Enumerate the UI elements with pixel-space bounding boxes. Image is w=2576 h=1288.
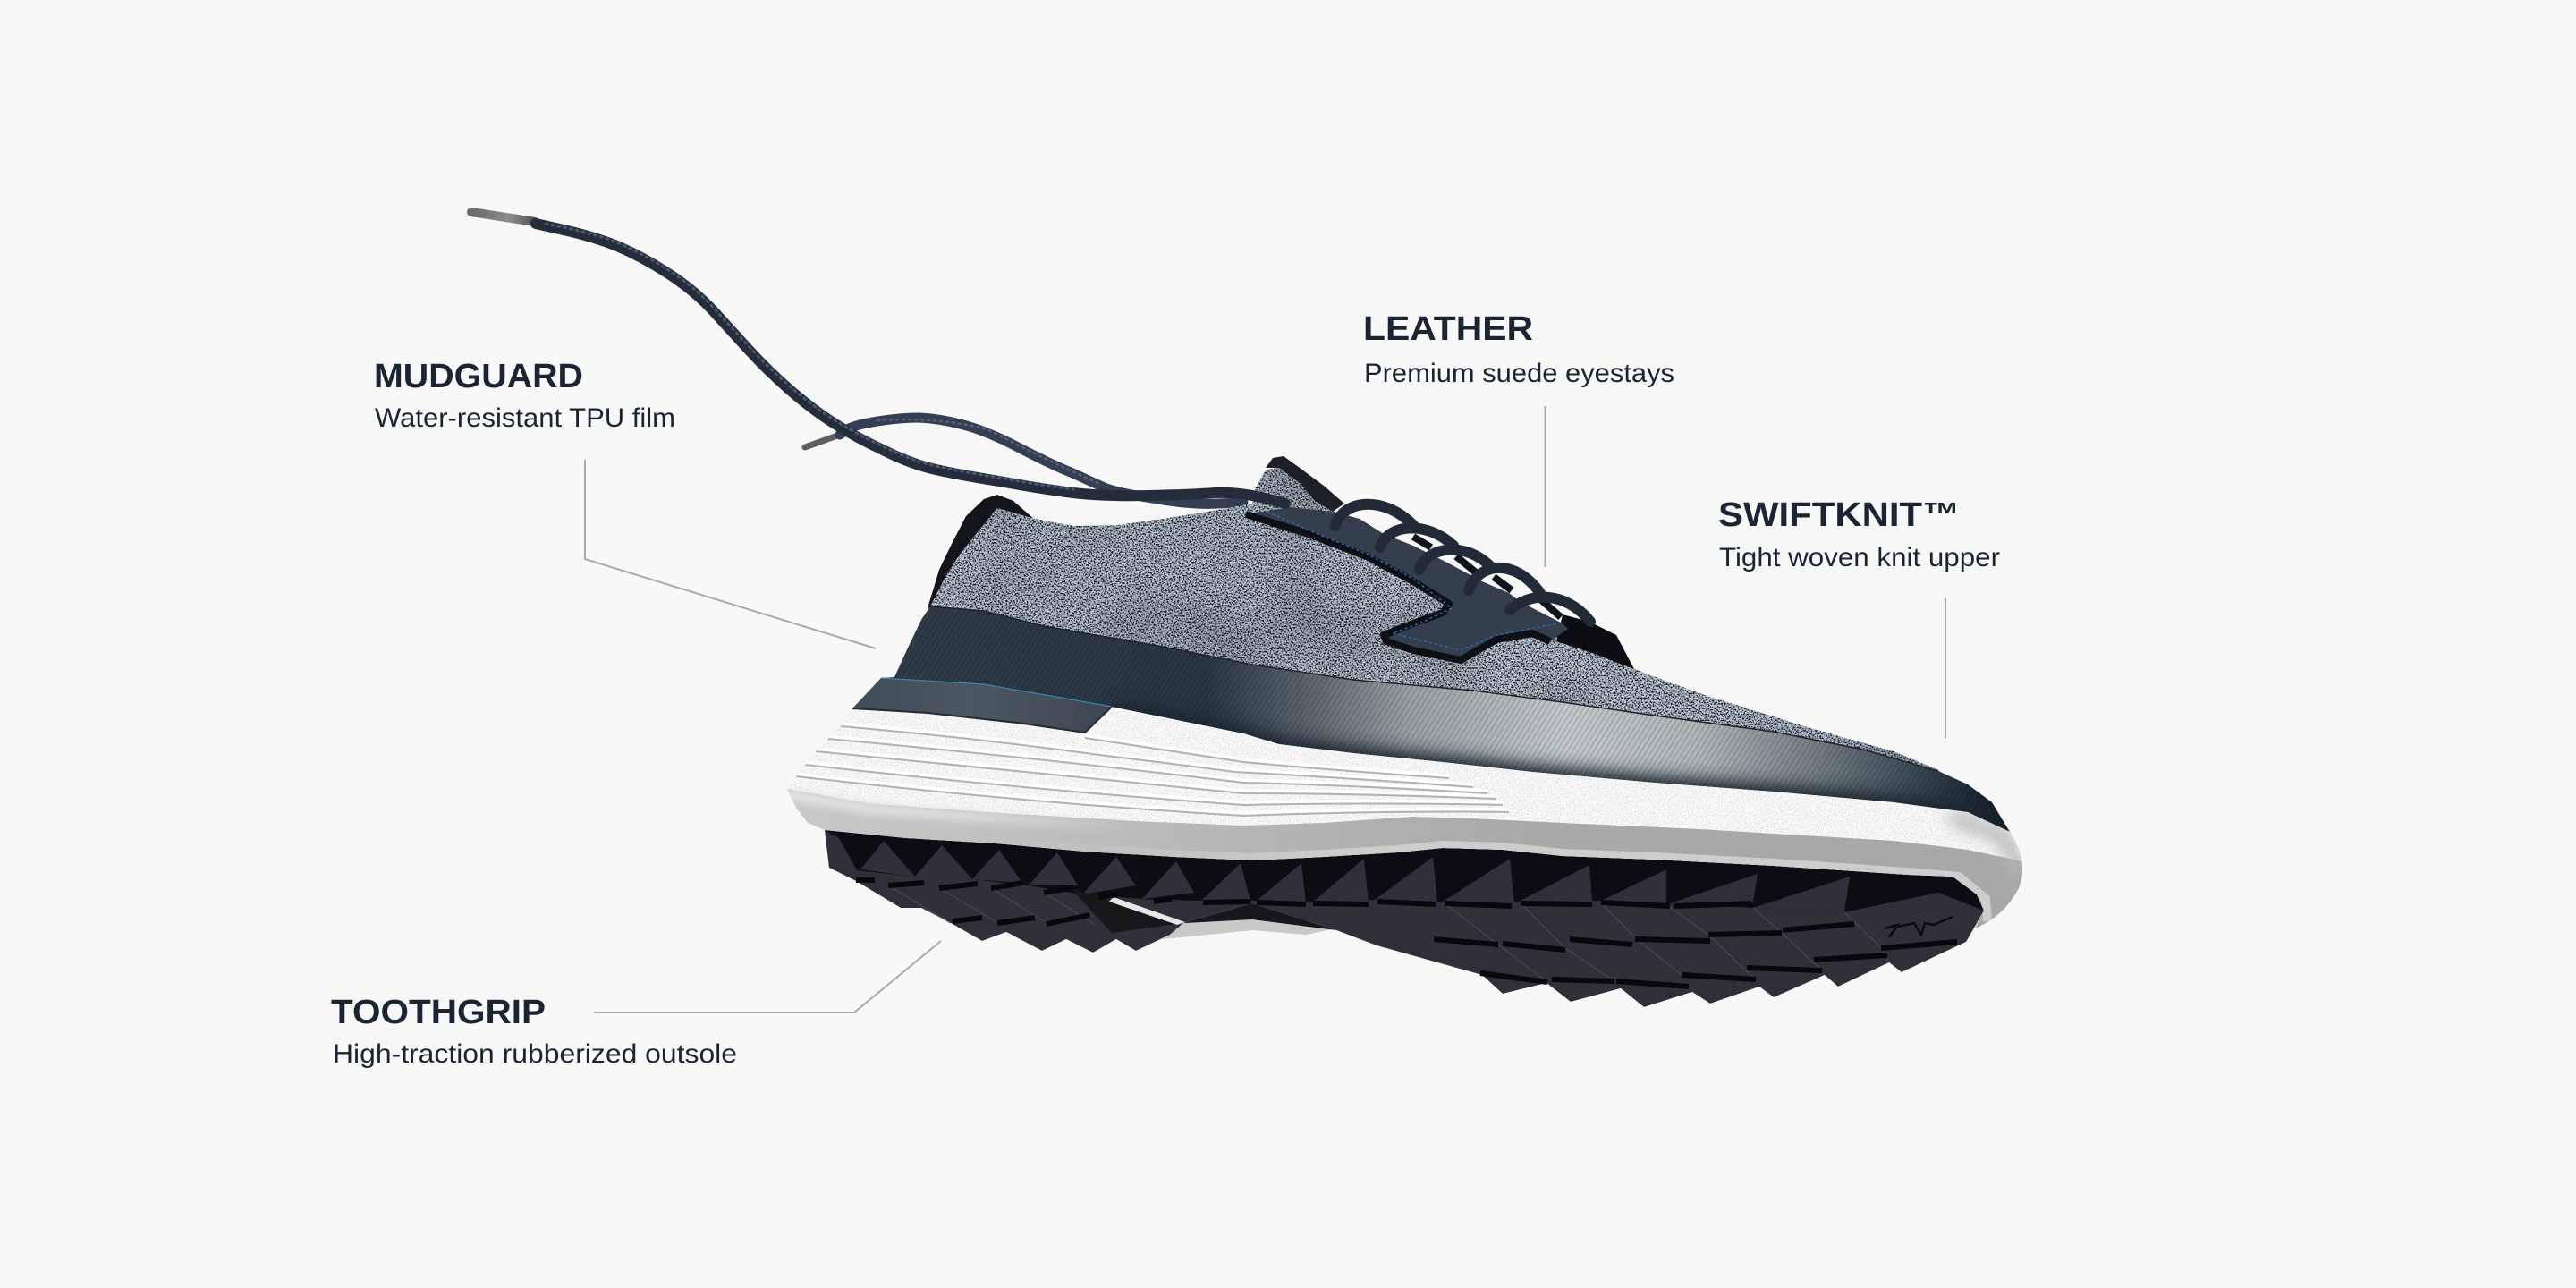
suede eyestay <box>1246 507 1568 660</box>
sculpted grooves highlight <box>796 724 1509 813</box>
rib edges <box>888 886 1889 982</box>
description: toothgrip: High-traction rubberized outsole <box>333 1039 737 1069</box>
leader line: mudguard <box>585 460 876 648</box>
dark arch wedge <box>1071 888 1183 933</box>
sculpted grooves <box>796 726 1509 816</box>
infographic canvas <box>331 208 2023 1068</box>
lower band <box>787 789 2030 939</box>
heading: toothgrip: TOOTHGRIP <box>331 994 546 1031</box>
logo mark <box>1885 917 1953 937</box>
loose lace, short strand <box>805 418 1243 504</box>
lit tooth facets <box>825 830 1984 942</box>
description: mudguard: Water-resistant TPU film <box>375 403 675 433</box>
leader line: leather <box>1544 406 1546 567</box>
heel tab <box>852 678 1112 733</box>
heading: mudguard: MUDGUARD <box>374 358 583 395</box>
loose lace, long strand <box>471 212 1285 504</box>
description: swiftknit: Tight woven knit upper <box>1719 543 2000 572</box>
outsole body <box>825 829 1984 1007</box>
callout: toothgrip <box>331 941 941 1069</box>
heading: swiftknit: SWIFTKNIT™ <box>1718 496 1960 534</box>
tread slits <box>856 880 1957 987</box>
teeth shadow band <box>825 829 1984 912</box>
lace loops <box>1335 504 1590 622</box>
description: leather: Premium suede eyestays <box>1364 359 1674 388</box>
midsole <box>787 708 2030 939</box>
lower lip <box>1116 841 1992 921</box>
knit upper <box>930 468 1941 771</box>
tongue rim <box>1266 456 1344 512</box>
tongue pieces under loops <box>1413 537 1561 617</box>
leader line: swiftknit <box>1945 598 1946 738</box>
white arch stripe <box>1109 897 1185 925</box>
band highlight <box>787 794 1136 826</box>
callout: swiftknit <box>1718 496 2000 738</box>
toe-end lining behind eyestay <box>1556 614 1634 669</box>
mudguard <box>884 606 2011 834</box>
callout: leather <box>1363 310 1674 567</box>
arch dark recess <box>1154 894 1342 930</box>
callout: mudguard <box>374 358 876 648</box>
toe shading <box>1950 816 2023 877</box>
outsole <box>825 829 1984 1007</box>
shoe illustration <box>471 212 2030 1007</box>
heel collar lining <box>928 495 1035 608</box>
heading: leather: LEATHER <box>1363 310 1533 348</box>
arch strip of midsole <box>1163 916 1336 939</box>
leader line: toothgrip <box>594 941 941 1013</box>
